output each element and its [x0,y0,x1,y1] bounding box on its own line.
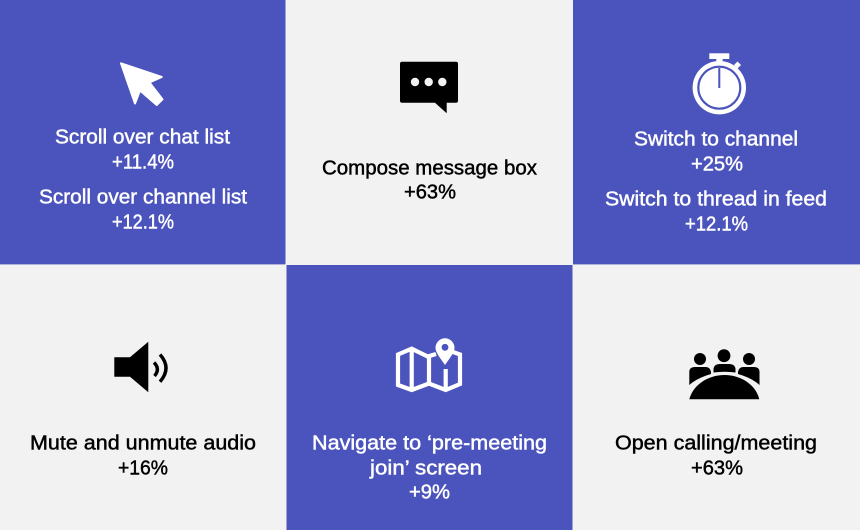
panel: mute [0,265,286,530]
text: scroll over chat list: Scroll over chat list [55,126,230,148]
panel: compose [286,0,573,264]
icon: stopwatch [693,53,746,114]
text: calling value: +63% [691,458,743,480]
panel: calling [573,265,860,530]
panel: navigate [286,265,572,530]
panel: scroll [0,0,286,264]
icon: chat bubble [400,62,458,113]
text: mute value: +16% [118,458,168,480]
text: chat list value: +11.4% [112,152,174,174]
text: navigate value: +9% [409,482,450,504]
text: scroll over channel list: Scroll over channel list [39,186,247,208]
icon: map with pin [398,338,460,390]
text: mute and unmute audio: Mute and unmute audio [30,432,256,454]
text: open calling/meeting: Open calling/meeting [615,432,817,454]
text: channel value: +25% [691,154,743,176]
text: compose value: +63% [404,182,456,204]
text: navigate heading line one: Navigate to ‘pre-meeting [312,432,547,454]
text: switch to thread in feed: Switch to thread in feed [605,188,827,210]
text: channel list value: +12.1% [112,212,174,234]
text: switch to channel: Switch to channel [634,128,798,150]
icon: speaker [114,342,166,392]
text: compose message box: Compose message box [322,158,537,180]
icon: people around table [689,349,760,399]
icon: cursor arrow [121,63,162,105]
text: thread value: +12.1% [685,214,748,236]
panel: switch [573,0,860,264]
text: navigate heading line two: join’ screen [369,458,482,480]
